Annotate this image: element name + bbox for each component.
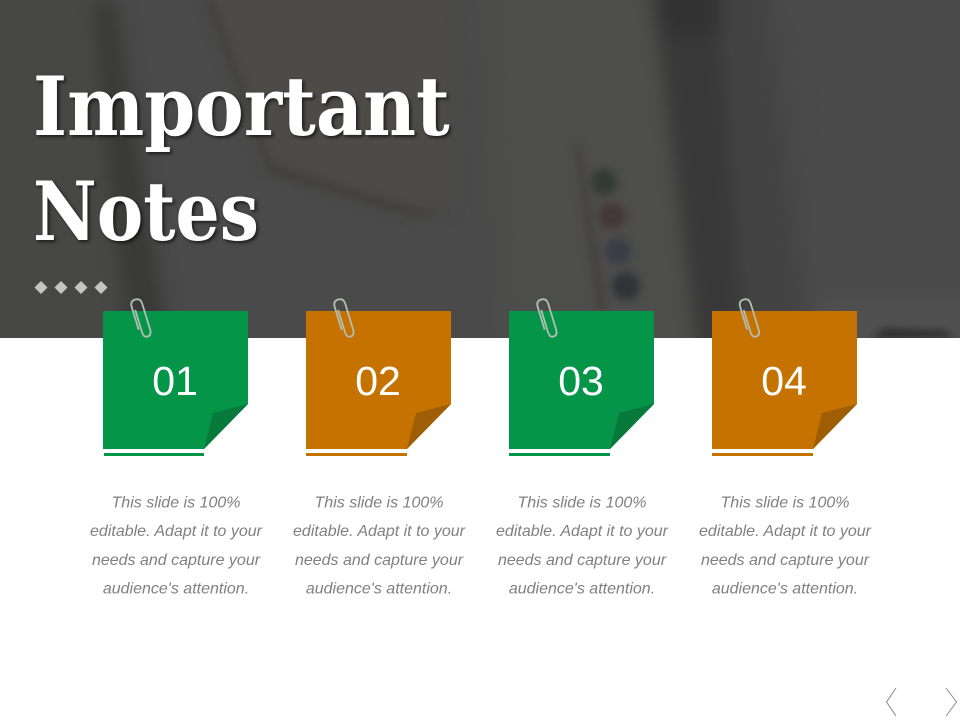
diamond row	[36, 282, 106, 293]
note 02 text: This slide is 100%	[315, 494, 443, 512]
note 02 text: audience's attention.	[306, 580, 452, 598]
title: Notes	[33, 165, 259, 260]
note 01 underline	[104, 453, 204, 456]
note 03 text: needs and capture your	[498, 552, 667, 569]
note 04 text: needs and capture your	[701, 552, 870, 569]
note 02 underline	[306, 453, 407, 456]
note 04 paperclip	[738, 298, 760, 338]
note 04 folded corner	[813, 404, 857, 449]
note 04 text: This slide is 100%	[721, 494, 849, 512]
note 03 number: 03	[558, 358, 604, 404]
note 02 sticky paper	[306, 311, 451, 449]
note 01 text: audience's attention.	[103, 580, 249, 598]
note 01	[90, 298, 263, 598]
note 02 folded corner	[407, 404, 451, 449]
note 01 text: needs and capture your	[92, 552, 261, 569]
note 04	[699, 298, 872, 598]
hero background photo	[0, 0, 960, 368]
note 03 text: audience's attention.	[509, 580, 655, 598]
note 02 number: 02	[355, 358, 401, 404]
note 03 text: This slide is 100%	[518, 494, 646, 512]
note 03 folded corner	[610, 404, 654, 449]
note 03	[496, 298, 669, 598]
title	[33, 60, 450, 260]
note 01 paperclip	[130, 298, 152, 338]
note 04 sticky paper	[712, 311, 857, 449]
note 01 text: editable. Adapt it to your	[90, 523, 263, 540]
note 02 text: editable. Adapt it to your	[293, 523, 466, 540]
note 02 text: needs and capture your	[295, 552, 464, 569]
note 03 paperclip	[536, 298, 558, 338]
note 01 text: This slide is 100%	[112, 494, 240, 512]
icon: previous arrow	[886, 688, 896, 716]
note 01 folded corner	[204, 404, 248, 449]
note 03 sticky paper	[509, 311, 654, 449]
title: Important	[33, 60, 450, 155]
note 03 underline	[509, 453, 610, 456]
note 03 text: editable. Adapt it to your	[496, 523, 669, 540]
note 04 underline	[712, 453, 813, 456]
note 01 number: 01	[152, 358, 198, 404]
note 04 text: editable. Adapt it to your	[699, 523, 872, 540]
note 04 text: audience's attention.	[712, 580, 858, 598]
note 02 paperclip	[333, 298, 355, 338]
note 01 sticky paper	[103, 311, 248, 449]
icon: next arrow	[946, 688, 956, 716]
note 04 number: 04	[761, 358, 807, 404]
note 02	[293, 298, 466, 598]
